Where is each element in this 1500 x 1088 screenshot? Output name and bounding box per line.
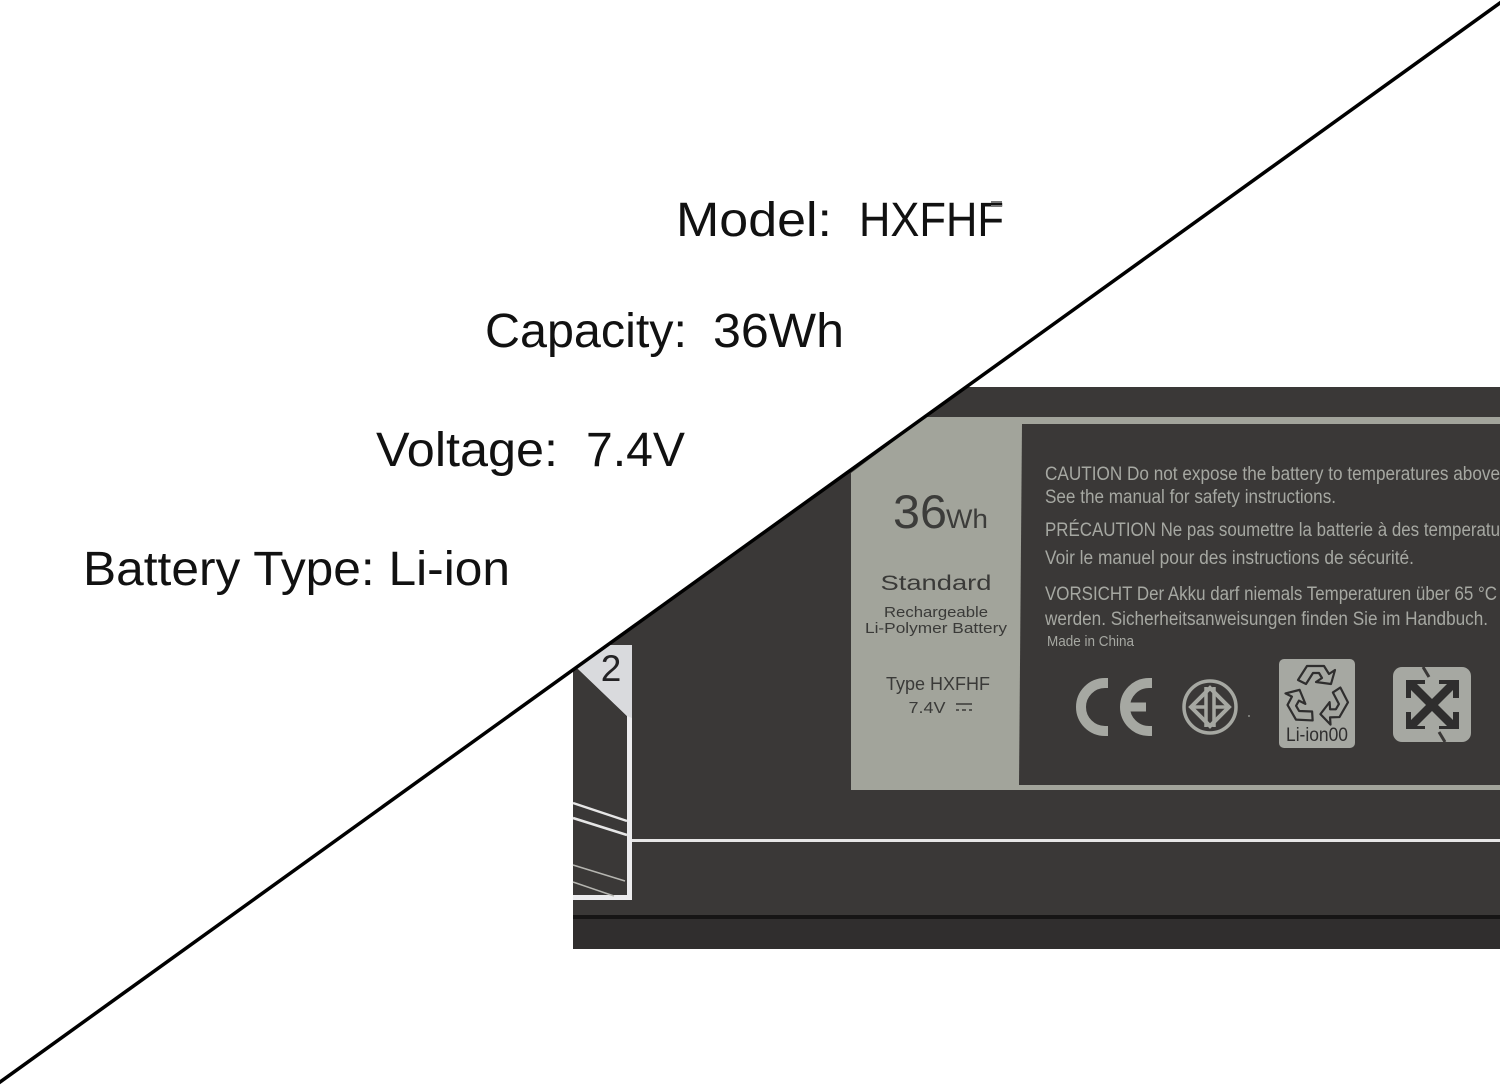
icon: battery recycling mark	[1393, 667, 1471, 742]
battery standard text: Standard	[880, 572, 992, 595]
safety text: See the manual for safety instructions.	[1045, 487, 1336, 508]
icon: Li-ion recycling badge	[1279, 659, 1355, 748]
text block: specifications	[83, 194, 1004, 596]
voltage	[376, 424, 685, 477]
corner tag with number 2: 2	[601, 648, 621, 689]
battery body	[573, 387, 1500, 949]
icon: Li-ion recycling badge: Li-ion00	[1286, 725, 1348, 746]
voltage: 7.4V	[586, 424, 685, 477]
model: Model:	[676, 194, 832, 247]
capacity marking: 36	[893, 485, 947, 538]
panel: battery photo	[573, 387, 1500, 949]
icon: circular certification mark	[1184, 681, 1250, 733]
safety text: Made in China	[1047, 633, 1135, 650]
DC symbol	[956, 704, 972, 710]
icon: CE mark	[1081, 683, 1152, 731]
capacity marking	[893, 485, 988, 538]
battery standard text: Li-Polymer Battery	[865, 620, 1008, 637]
battery standard text: Type HXFHF	[886, 674, 990, 694]
safety text: Voir le manuel pour des instructions de sécurité.	[1045, 548, 1414, 569]
capacity	[485, 305, 844, 358]
model	[676, 194, 1004, 247]
battery standard text	[865, 572, 1008, 717]
voltage: Voltage:	[376, 424, 558, 477]
label: grey specification panel	[851, 417, 1500, 790]
corner tag with number 2	[573, 645, 632, 900]
battery standard text: 7.4V	[908, 700, 946, 717]
battery type: Battery Type: Li-ion	[83, 543, 510, 596]
white horizontal line	[630, 839, 1500, 842]
capacity: Capacity:	[485, 305, 687, 358]
capacity: 36Wh	[713, 305, 844, 358]
safety text	[1044, 464, 1500, 650]
model: HXFHF	[859, 194, 1004, 247]
capacity marking: Wh	[946, 504, 988, 534]
battery standard text: Rechargeable	[884, 604, 988, 621]
battery bottom edge	[573, 915, 1500, 949]
